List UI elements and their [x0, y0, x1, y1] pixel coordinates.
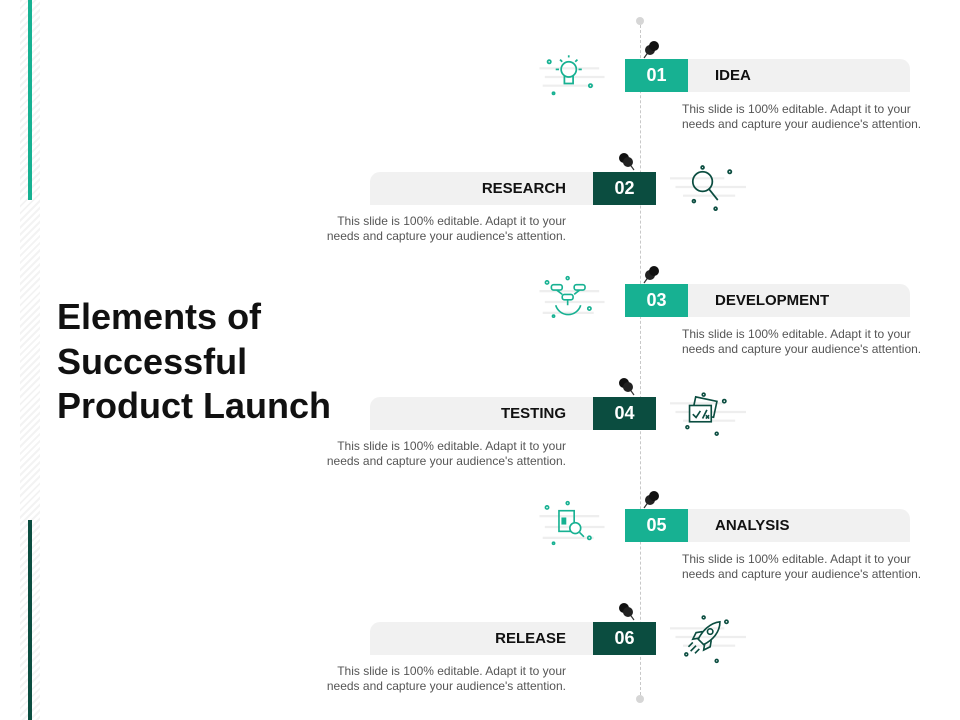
pin [619, 153, 634, 170]
number [593, 397, 656, 430]
number: 05 [646, 515, 667, 535]
axis bottom dot [636, 695, 644, 703]
description: This slide is 100% editable. Adapt it to your needs and capture your audience's attention. [327, 664, 566, 692]
pin [644, 491, 659, 508]
number [625, 59, 688, 92]
accent line dark [28, 520, 32, 720]
label: TESTING [501, 405, 566, 422]
title [57, 296, 331, 426]
title: Successful [57, 340, 247, 382]
pin [619, 603, 634, 620]
description: This slide is 100% editable. Adapt it to your needs and capture your audience's attention. [327, 439, 566, 468]
title: Elements of [57, 296, 261, 337]
label: ANALYSIS [715, 517, 789, 534]
bar [688, 59, 910, 92]
decorative hatched left strip [20, 0, 40, 720]
number [593, 172, 656, 205]
timeline axis [640, 20, 641, 700]
label: RESEARCH [482, 180, 566, 197]
icon: gear flowchart [540, 276, 604, 318]
step 02: research [327, 153, 746, 242]
step 03: development [540, 266, 921, 356]
number: 02 [614, 178, 635, 198]
number: 03 [646, 290, 667, 310]
description: This slide is 100% editable. Adapt it to your needs and capture your audience's attention. [682, 552, 921, 580]
accent line teal [28, 0, 32, 200]
bar [370, 397, 593, 430]
label: IDEA [715, 67, 751, 84]
step 01: idea [540, 41, 921, 130]
bar [688, 509, 910, 542]
bar [370, 622, 593, 655]
number: 04 [614, 403, 635, 423]
icon: report magnifier [540, 500, 604, 546]
label: RELEASE [495, 630, 566, 647]
pin [644, 266, 659, 284]
pin [644, 41, 659, 58]
description: This slide is 100% editable. Adapt it to your needs and capture your audience's attention. [682, 102, 921, 130]
icon: test cards [670, 392, 746, 436]
pin [619, 378, 634, 396]
label: DEVELOPMENT [715, 292, 829, 309]
description: This slide is 100% editable. Adapt it to your needs and capture your audience's attention. [327, 214, 566, 242]
number [625, 284, 688, 317]
number: 01 [646, 65, 667, 85]
axis top dot [636, 17, 644, 25]
description: This slide is 100% editable. Adapt it to your needs and capture your audience's attention. [682, 327, 921, 356]
bar [370, 172, 593, 205]
icon: light bulb [540, 55, 604, 96]
number: 06 [614, 628, 635, 648]
step 05: analysis [540, 491, 921, 580]
number [593, 622, 656, 655]
icon: rocket [670, 615, 746, 664]
step 06: release [327, 603, 746, 692]
number [625, 509, 688, 542]
icon: magnifier [670, 165, 746, 211]
step 04: testing [327, 378, 746, 468]
title: Product Launch [57, 385, 331, 426]
bar [688, 284, 910, 317]
